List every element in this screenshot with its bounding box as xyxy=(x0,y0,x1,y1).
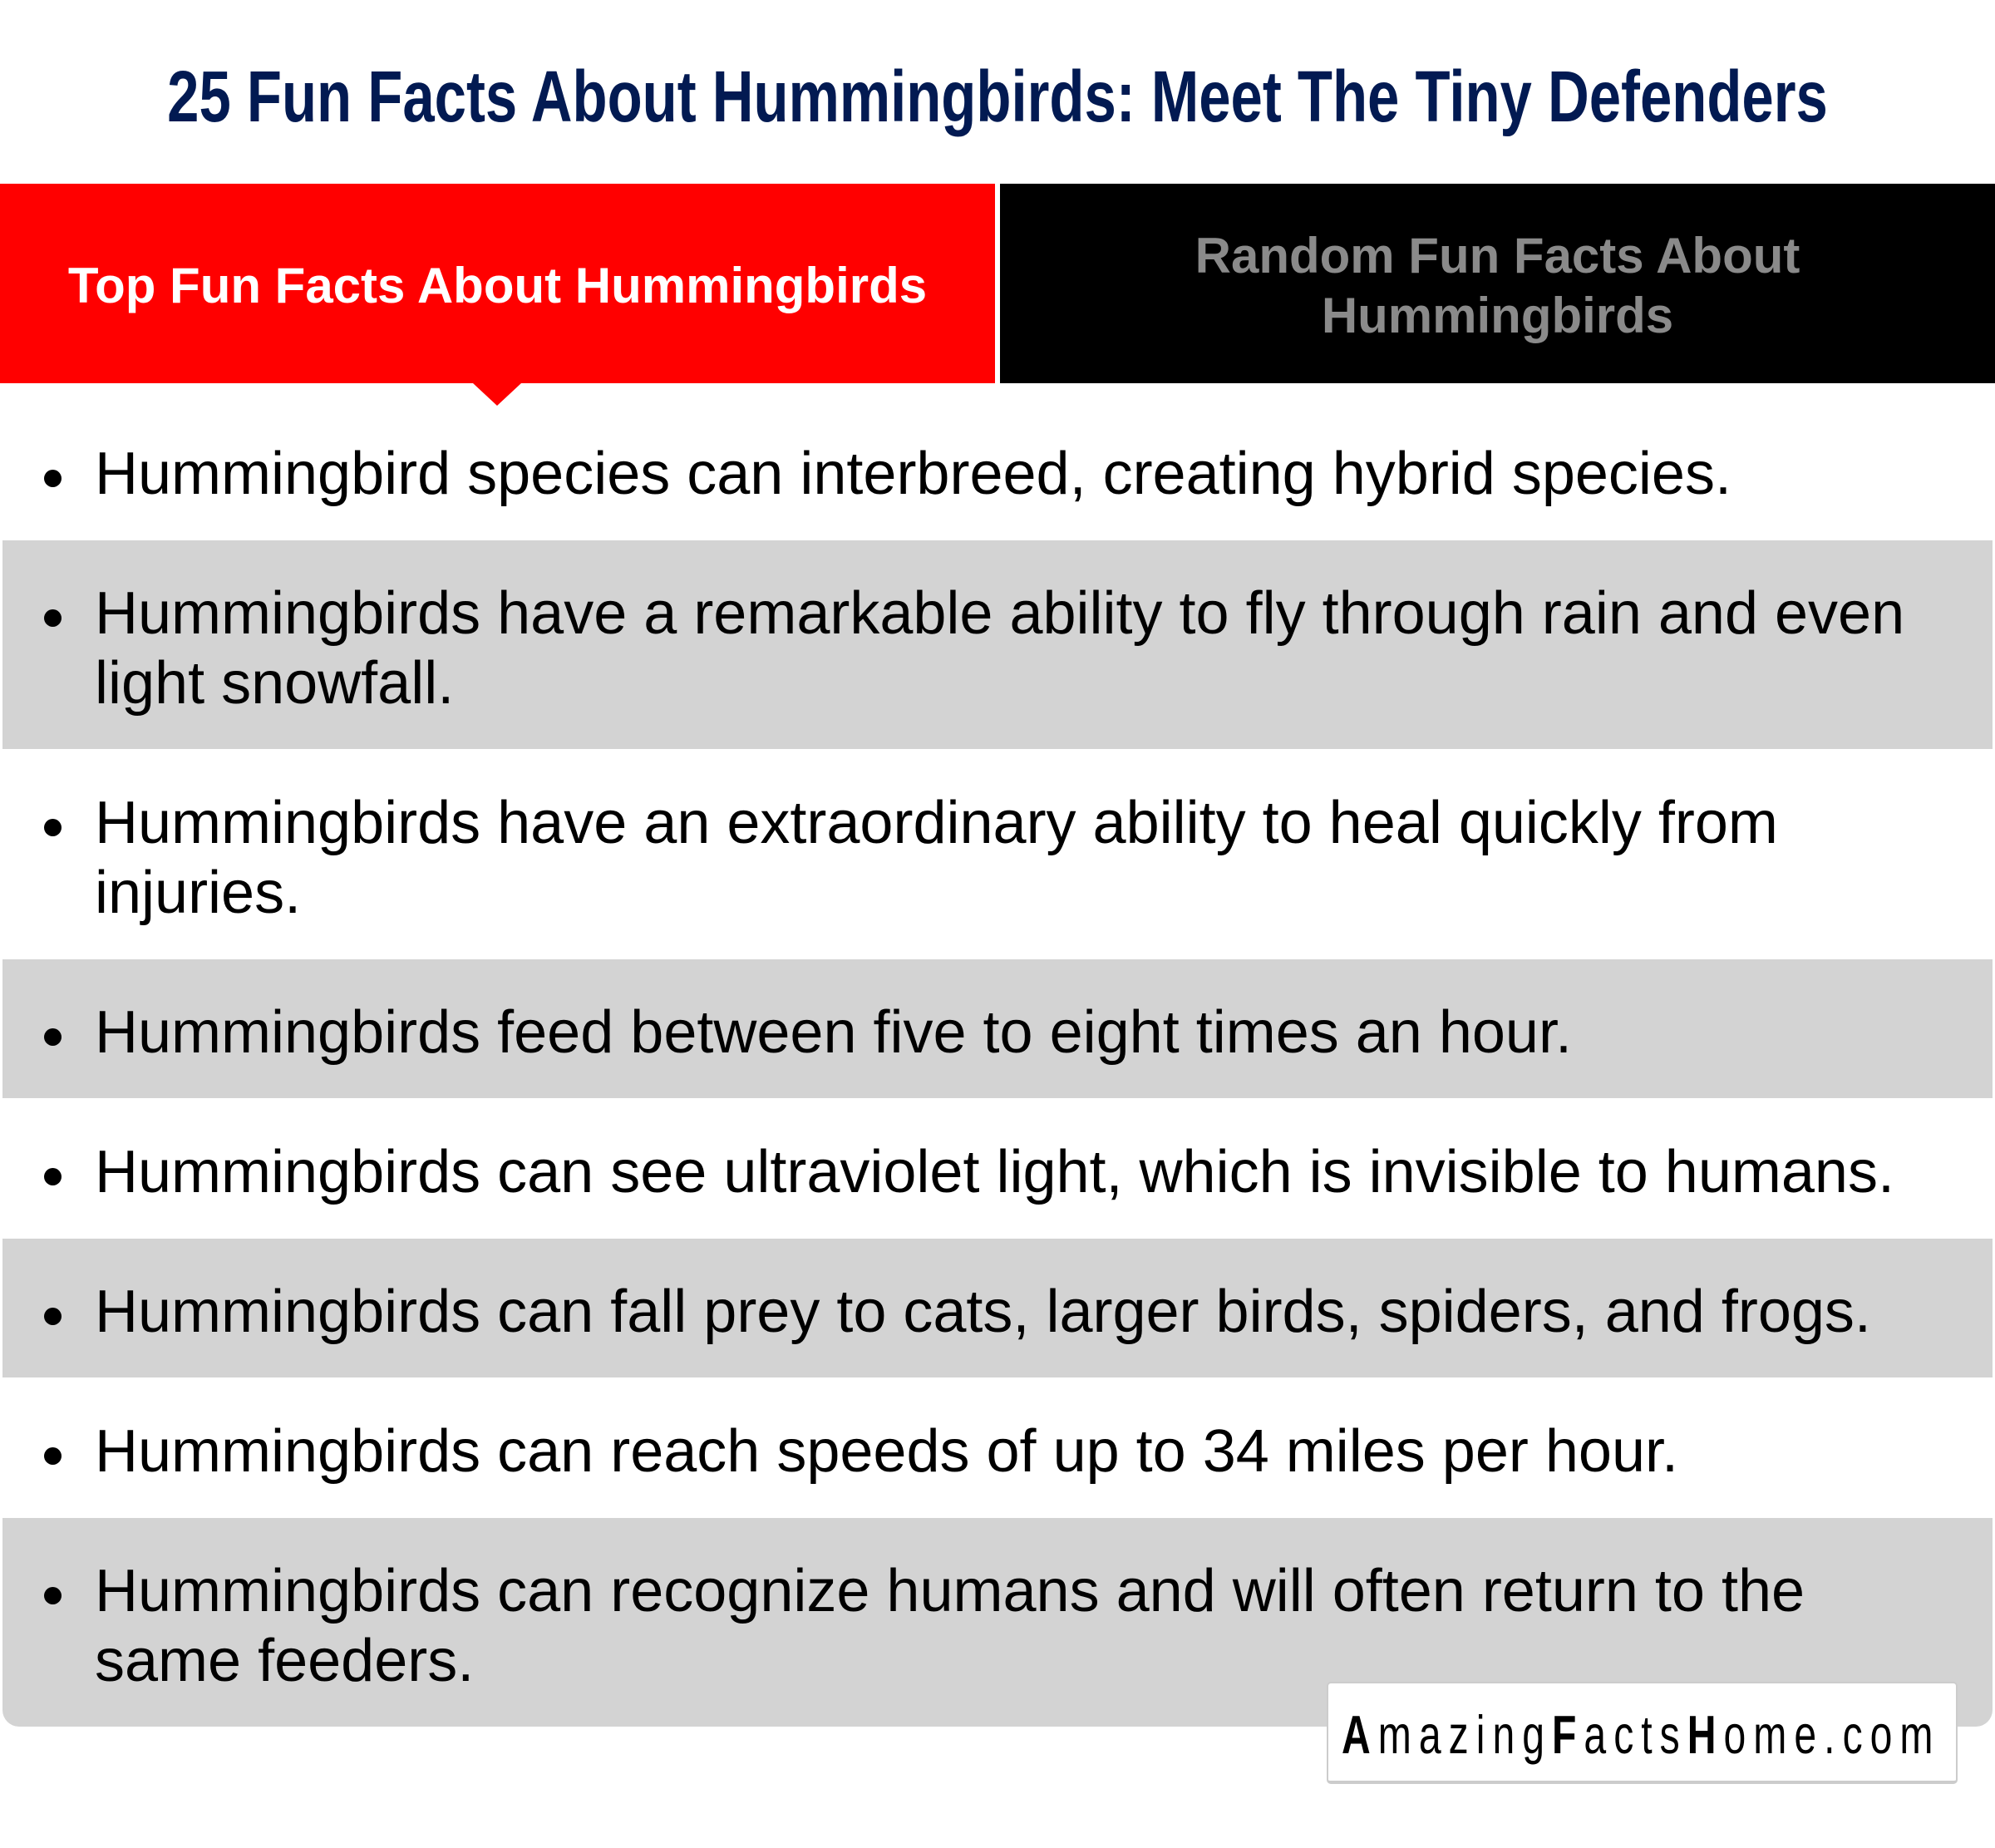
fact row 7 xyxy=(44,1418,1678,1485)
fact 7 bullet xyxy=(44,1447,62,1465)
tab label: random fun facts: Random Fun Facts About xyxy=(1195,228,1800,283)
tab pointer arrow xyxy=(473,383,521,406)
fact row 3 xyxy=(44,790,1778,926)
tab: top fun facts (active, red) xyxy=(0,184,995,383)
fact 8 text xyxy=(95,1558,1805,1694)
fact 2 text: Hummingbirds have a remarkable ability to fly through rain and even xyxy=(95,580,1904,647)
tab label: top fun facts: Top Fun Facts About Hummingbirds xyxy=(68,258,927,313)
fact 5 bullet xyxy=(44,1168,62,1185)
fact 8 text: Hummingbirds can recognize humans and will often return to the xyxy=(95,1558,1805,1624)
fact 2 bullet xyxy=(44,609,62,627)
fact 3 text: injuries. xyxy=(95,860,301,926)
watermark badge xyxy=(1327,1682,1958,1784)
tab label: random fun facts: Hummingbirds xyxy=(1322,288,1673,343)
fact 6 text: Hummingbirds can fall prey to cats, larger birds, spiders, and frogs. xyxy=(95,1279,1871,1345)
tab label: random fun facts xyxy=(1195,228,1800,343)
fact row 4 xyxy=(2,959,1993,1098)
fact 8 text: same feeders. xyxy=(95,1628,474,1694)
fact 1 bullet xyxy=(44,470,62,487)
fact 4 text: Hummingbirds feed between five to eight times an hour. xyxy=(95,999,1572,1066)
fact 5 text: Hummingbirds can see ultraviolet light, which is invisible to humans. xyxy=(95,1139,1894,1205)
fact 3 bullet xyxy=(44,819,62,836)
fact row 1 xyxy=(44,441,1731,507)
tab: random fun facts (inactive, black) xyxy=(1000,184,1995,383)
fact row 8 xyxy=(2,1518,1993,1727)
fact 3 text: Hummingbirds have an extraordinary ability to heal quickly from xyxy=(95,790,1778,856)
fact row 5 xyxy=(44,1139,1894,1205)
fact 2 text xyxy=(95,580,1904,717)
fact 2 text: light snowfall. xyxy=(95,650,454,717)
fact 1 text: Hummingbird species can interbreed, creating hybrid species. xyxy=(95,441,1731,507)
title: 25 Fun Facts About Hummingbirds: Meet The Tiny Defenders xyxy=(167,57,1828,137)
fact 3 text xyxy=(95,790,1778,926)
fact row 2 xyxy=(2,540,1993,749)
watermark text: AmazingFactsHome.com xyxy=(1342,1704,1941,1765)
fact 4 bullet xyxy=(44,1028,62,1046)
fact 7 text: Hummingbirds can reach speeds of up to 34 miles per hour. xyxy=(95,1418,1678,1485)
fact row 6 xyxy=(2,1239,1993,1377)
fact 6 bullet xyxy=(44,1308,62,1325)
fact 8 bullet xyxy=(44,1587,62,1604)
